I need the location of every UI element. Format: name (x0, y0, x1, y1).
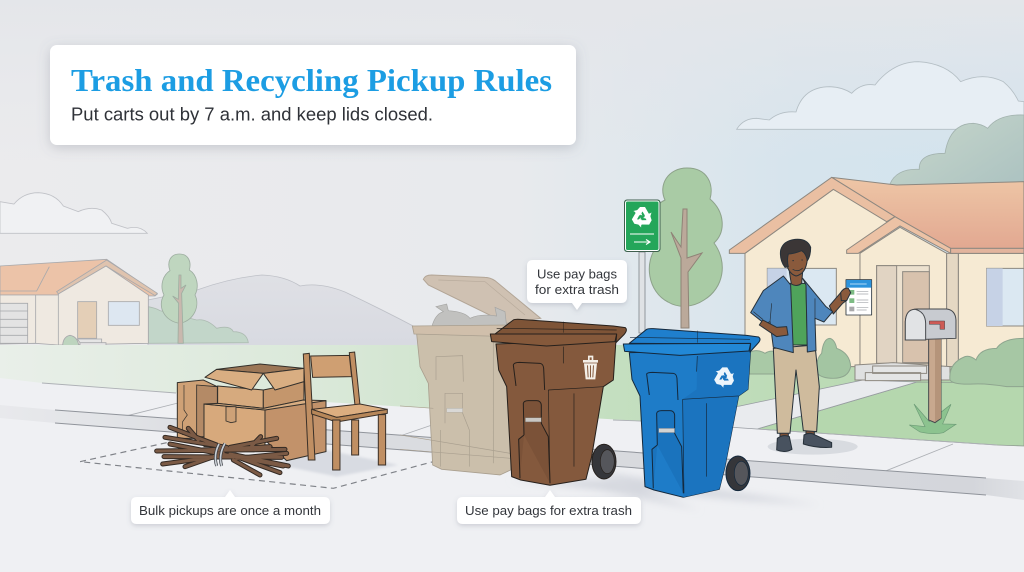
head (786, 247, 807, 276)
hair (780, 239, 811, 267)
sign recycling icon (629, 207, 654, 230)
brown wheel (592, 444, 616, 479)
callout: top pay bags (527, 260, 627, 310)
bush behind left house (148, 307, 248, 343)
left house window (108, 302, 139, 325)
sign plate (624, 200, 660, 252)
schedule paper (846, 280, 872, 315)
right window (987, 268, 1024, 326)
trash bags (432, 304, 507, 327)
twine (215, 443, 225, 466)
walkway (640, 380, 917, 429)
front gable roof (847, 217, 951, 253)
background tree by the sign (649, 168, 722, 328)
left tree trunk (173, 275, 186, 343)
jacket (751, 276, 793, 353)
tree crown (649, 168, 722, 306)
person holding schedule (751, 239, 872, 455)
ghost details (400, 337, 510, 467)
bulk callout text: Bulk pickups are once a month (139, 503, 321, 518)
brown recess (513, 362, 545, 390)
ghost rim (412, 325, 510, 337)
left background tree (161, 254, 197, 343)
blue handle slot (652, 411, 683, 493)
bundle of sticks (157, 427, 288, 475)
mailbox (905, 309, 956, 434)
cart shadows (510, 470, 820, 510)
ankles (780, 430, 814, 438)
blue cart recycling icon (711, 367, 736, 391)
blue recycling cart (623, 329, 760, 497)
ground shadow (768, 439, 858, 455)
title card (50, 45, 576, 145)
callout: bottom pay bags (457, 490, 641, 524)
front steps (855, 363, 950, 380)
left house walls (0, 266, 148, 345)
blue recess (647, 372, 678, 400)
cloud: left (0, 193, 147, 233)
gable roof trim (729, 177, 895, 253)
grass (0, 345, 1024, 446)
callout: top pay bags second line: for extra trash (535, 282, 619, 297)
ghost body (417, 330, 511, 475)
chair (303, 352, 387, 470)
bushes by the house (749, 351, 775, 374)
bulk pile (80, 352, 433, 488)
ground and sidewalk (0, 346, 1024, 572)
distant hills (148, 275, 450, 346)
left house (0, 259, 248, 347)
left house door (78, 302, 97, 338)
brown cart trash icon (583, 356, 598, 379)
small bush (63, 335, 79, 347)
neck (789, 272, 803, 286)
left window (767, 268, 836, 325)
garage door (0, 303, 28, 343)
pile shadow (270, 450, 398, 477)
post (929, 338, 941, 423)
title: Trash and Recycling Pickup Rules (71, 62, 552, 98)
far bush behind right house (890, 115, 1024, 200)
steps (77, 339, 106, 347)
wing walls (958, 253, 1024, 367)
right lawn (757, 382, 1024, 446)
door frame (877, 266, 929, 363)
upper open box (218, 386, 263, 408)
face (792, 260, 803, 271)
red flag (929, 321, 945, 329)
brown handle slot (519, 401, 550, 483)
left house roof (0, 259, 157, 296)
box (905, 309, 956, 340)
cloud: upper right (737, 62, 1024, 129)
brown lid (495, 319, 626, 343)
blue wheel (726, 456, 750, 491)
grass tuft (909, 404, 956, 434)
large box side (265, 401, 326, 461)
dashed bulk pickup area (80, 443, 433, 488)
faded cart: earlier position (400, 275, 541, 475)
box tape (226, 407, 236, 423)
tree trunk (671, 209, 702, 328)
front entry wall (860, 227, 947, 367)
blue lid (629, 329, 760, 352)
fingers (841, 288, 851, 301)
back box (177, 380, 217, 438)
left tree crown (161, 254, 197, 323)
door (903, 272, 929, 363)
large box front (204, 404, 265, 447)
right house (729, 177, 1024, 387)
sidewalk edges and joints (42, 383, 997, 472)
sign post (639, 252, 645, 333)
trousers (773, 345, 819, 433)
right forearm and hand (829, 291, 849, 314)
shoes (777, 436, 792, 451)
shirt (790, 283, 807, 345)
blue body (629, 349, 751, 497)
subtitle: Put carts out by 7 a.m. and keep lids closed. (71, 104, 433, 124)
brown body (496, 340, 616, 485)
callout: bulk pickups (131, 490, 330, 524)
gable wall (745, 189, 890, 367)
bottom callout text: Use pay bags for extra trash (465, 503, 632, 518)
main roof (832, 177, 1024, 248)
callout text: Use pay bags (537, 266, 617, 282)
sign divider and arrow (630, 234, 654, 244)
curb (0, 405, 1024, 500)
left forearm to hip (759, 320, 788, 337)
recycling sign (624, 200, 660, 333)
background: sky (0, 0, 1024, 350)
open lid (423, 275, 541, 323)
brown trash cart (490, 319, 626, 485)
